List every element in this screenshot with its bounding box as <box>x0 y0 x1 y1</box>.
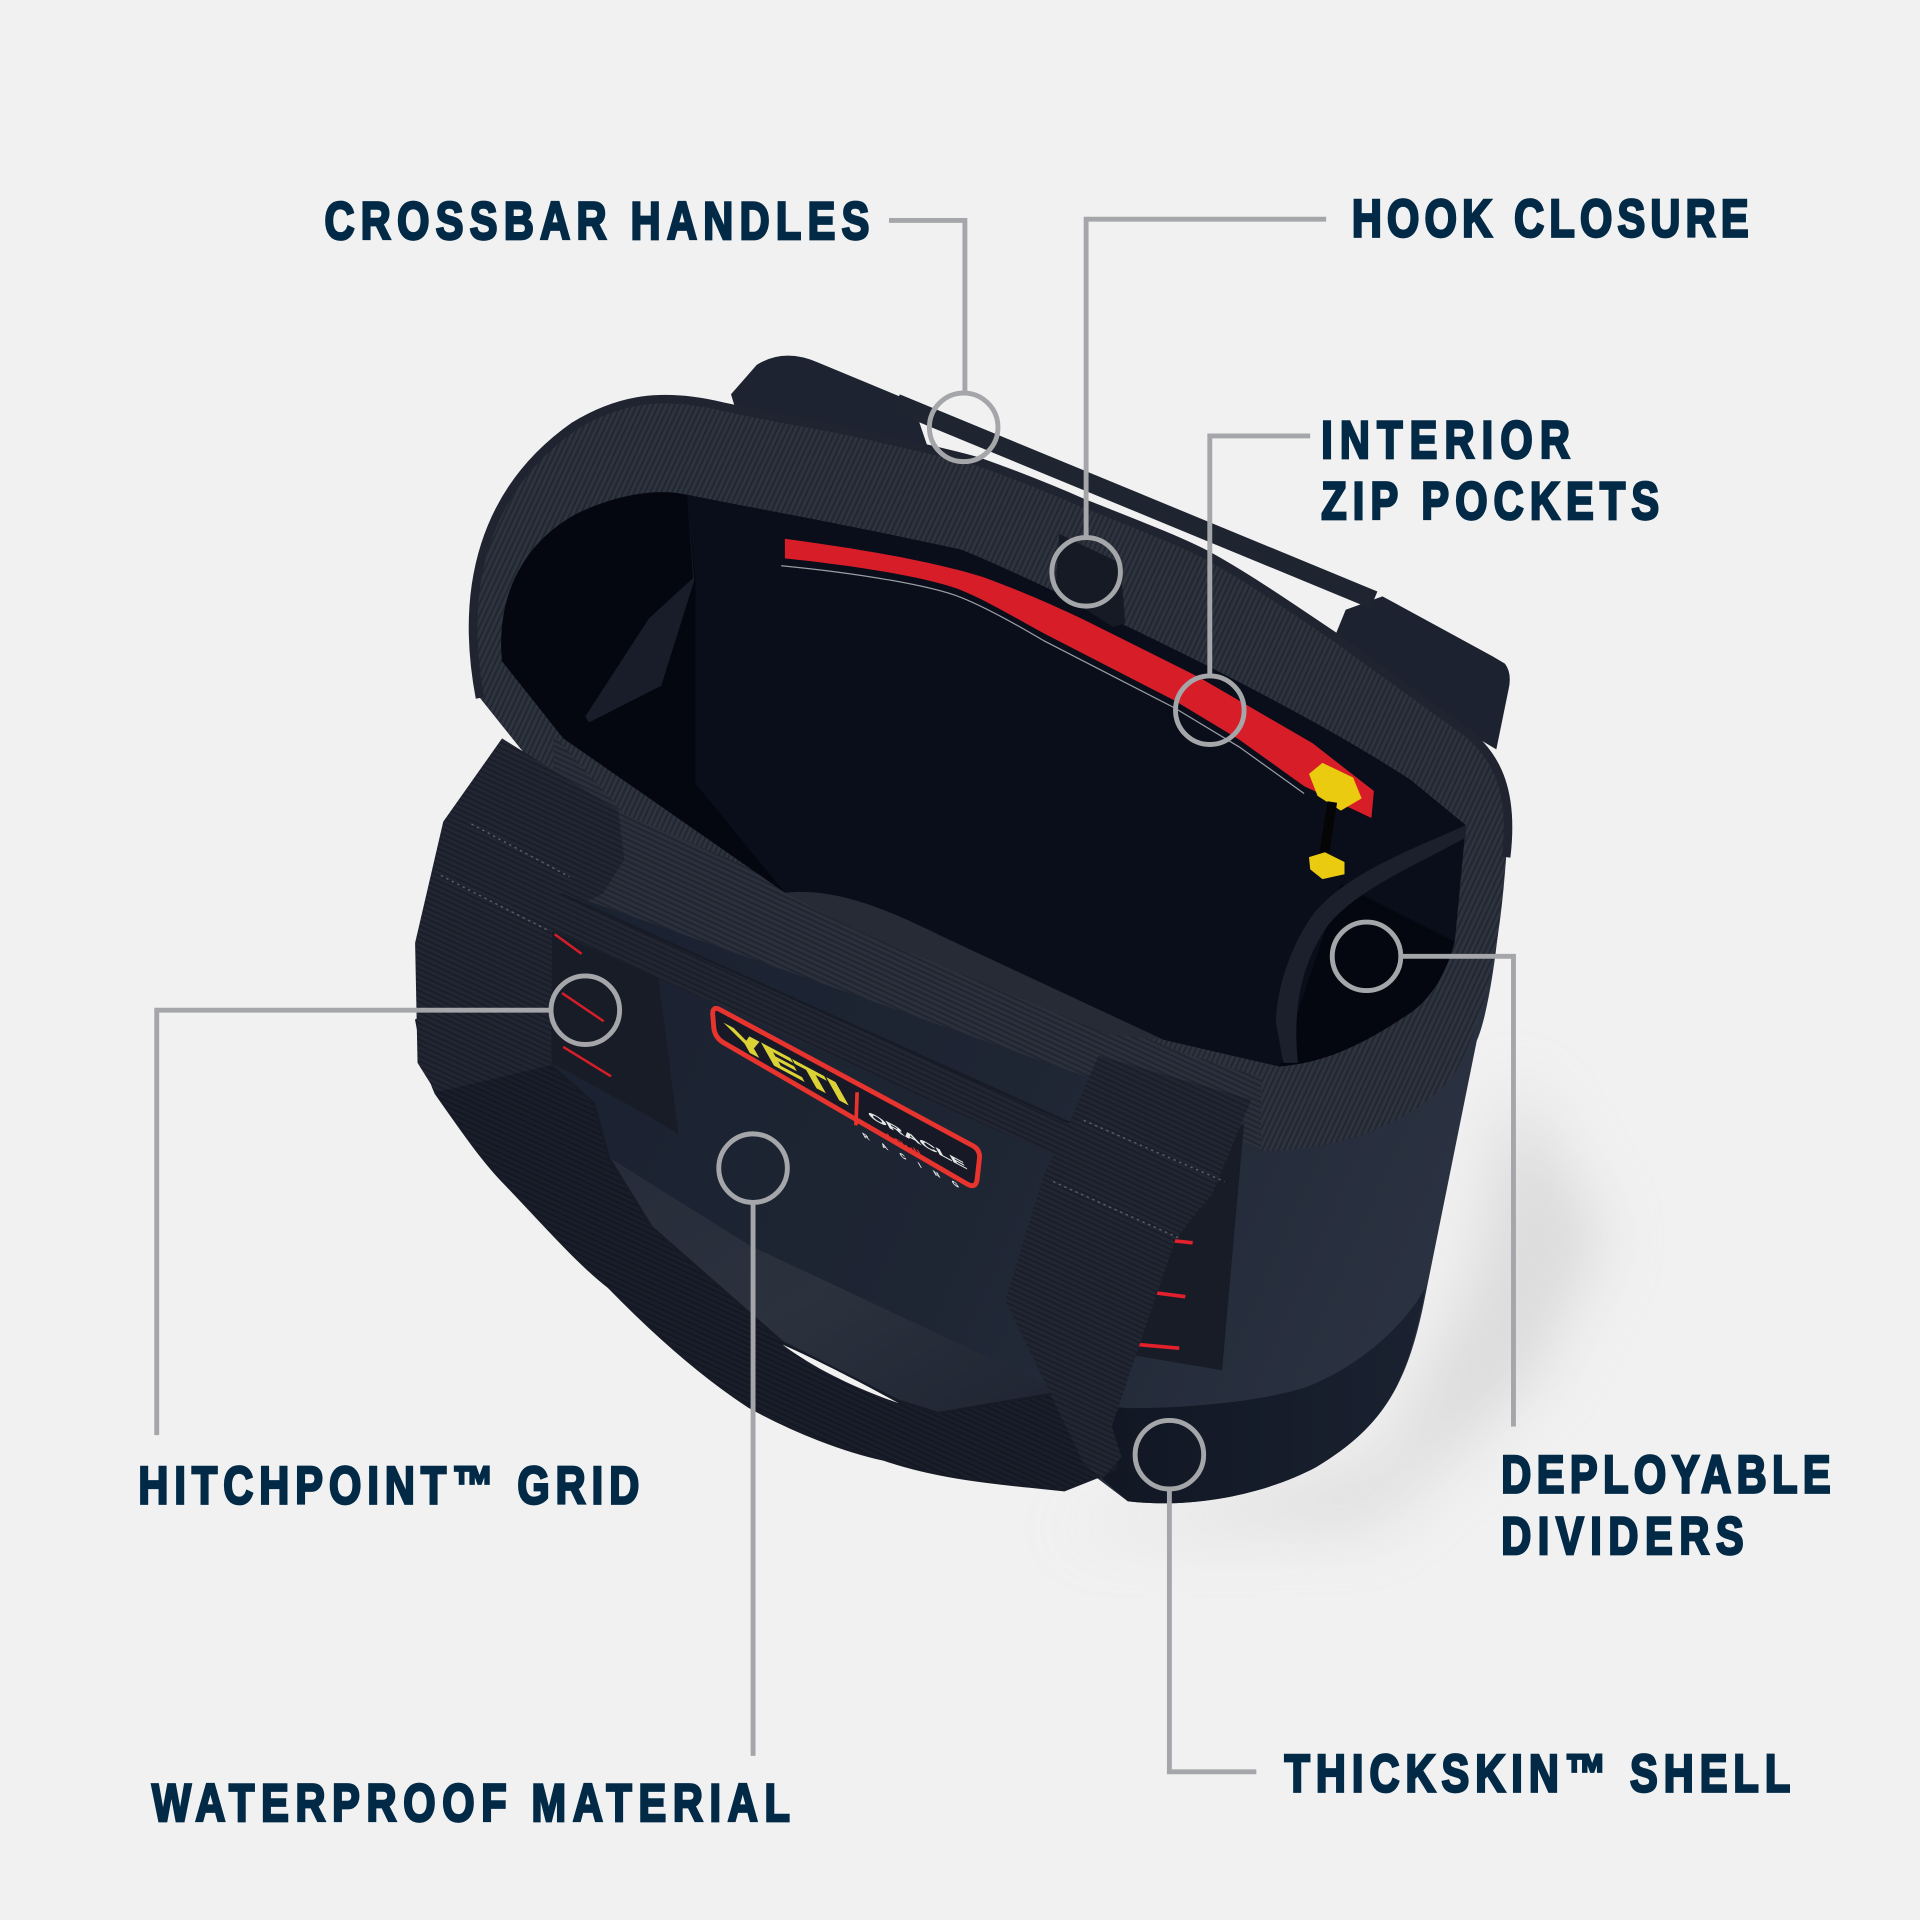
label line 1: INTERIOR <box>1321 411 1570 470</box>
marker <box>1176 676 1244 744</box>
lower front panel <box>609 1157 1054 1413</box>
label: HOOK CLOSURE <box>1352 189 1749 249</box>
left strap stitching <box>441 824 569 931</box>
callout: waterproof material <box>152 1134 790 1833</box>
leader <box>1210 436 1310 675</box>
logo patch <box>713 1008 980 1190</box>
back handle right tab <box>1335 596 1510 749</box>
patch team sub name: RACING <box>861 1131 961 1190</box>
front handle lower loop <box>416 1020 1117 1490</box>
bag illustration <box>415 356 1604 1531</box>
leader <box>157 1010 550 1435</box>
back crossbar handle <box>896 403 1374 600</box>
rim front band <box>551 735 1261 1151</box>
label line 2: DIVIDERS <box>1501 1507 1744 1566</box>
bag shadow <box>1053 1078 1604 1531</box>
bag body <box>545 845 1504 1503</box>
callout: interior zip pockets <box>1176 411 1659 744</box>
label: THICKSKIN™ SHELL <box>1284 1745 1790 1804</box>
marker <box>719 1134 787 1202</box>
callout: hitchpoint grid <box>138 976 639 1516</box>
leader <box>751 1204 755 1756</box>
back wall panel <box>687 495 1466 1067</box>
left red lines <box>555 934 611 1076</box>
patch YETI: YETI <box>721 1017 855 1113</box>
handle gap <box>782 1344 899 1403</box>
zipper red teeth <box>785 539 1374 818</box>
floor fold <box>785 892 1163 1040</box>
label line 1: DEPLOYABLE <box>1501 1446 1831 1505</box>
patch red team name: Red Bull <box>863 1120 925 1160</box>
callout: deployable dividers <box>1332 922 1831 1566</box>
zipper cord <box>1324 802 1332 857</box>
leader <box>1169 1490 1256 1772</box>
marker <box>1332 922 1401 991</box>
front crossbar handle <box>556 912 1069 1142</box>
callout: thickskin shell <box>1135 1420 1790 1804</box>
left strap <box>415 738 624 1092</box>
hook closure <box>1056 534 1125 627</box>
zipper pull <box>1309 763 1362 811</box>
label: WATERPROOF MATERIAL <box>152 1774 790 1833</box>
leader <box>1086 219 1326 536</box>
interior opening <box>501 492 1466 1067</box>
zip pocket zipper <box>781 539 1374 879</box>
bag base <box>1078 1288 1425 1503</box>
right red lines <box>1138 1240 1193 1348</box>
right divider <box>1276 825 1466 1063</box>
right strap stitching <box>1053 1120 1224 1239</box>
label: HITCHPOINT™ GRID <box>138 1457 639 1516</box>
rim outer <box>473 399 1508 1151</box>
marker <box>929 393 998 462</box>
patch red border <box>713 1008 980 1186</box>
leader <box>889 220 965 392</box>
patch team name: ORACLE <box>865 1108 969 1172</box>
right webbing panel <box>1135 1123 1244 1370</box>
zipper stitch line <box>781 566 1304 793</box>
right strap <box>1005 1056 1251 1479</box>
patch divider <box>856 1092 857 1125</box>
label line 2: ZIP POCKETS <box>1321 472 1659 531</box>
callout: hook closure <box>1052 189 1749 606</box>
left divider <box>585 492 694 722</box>
crossbar edge <box>561 894 1078 1127</box>
zipper cord toggle <box>1309 852 1344 879</box>
rim binding top edge <box>473 399 1508 857</box>
marker <box>1052 538 1120 606</box>
marker <box>551 976 620 1044</box>
label: CROSSBAR HANDLES <box>324 192 869 251</box>
left webbing panel <box>545 916 678 1134</box>
leader <box>1402 956 1513 1427</box>
marker <box>1135 1420 1204 1489</box>
back handle left tab <box>731 356 931 456</box>
callout: crossbar handles <box>324 192 998 462</box>
